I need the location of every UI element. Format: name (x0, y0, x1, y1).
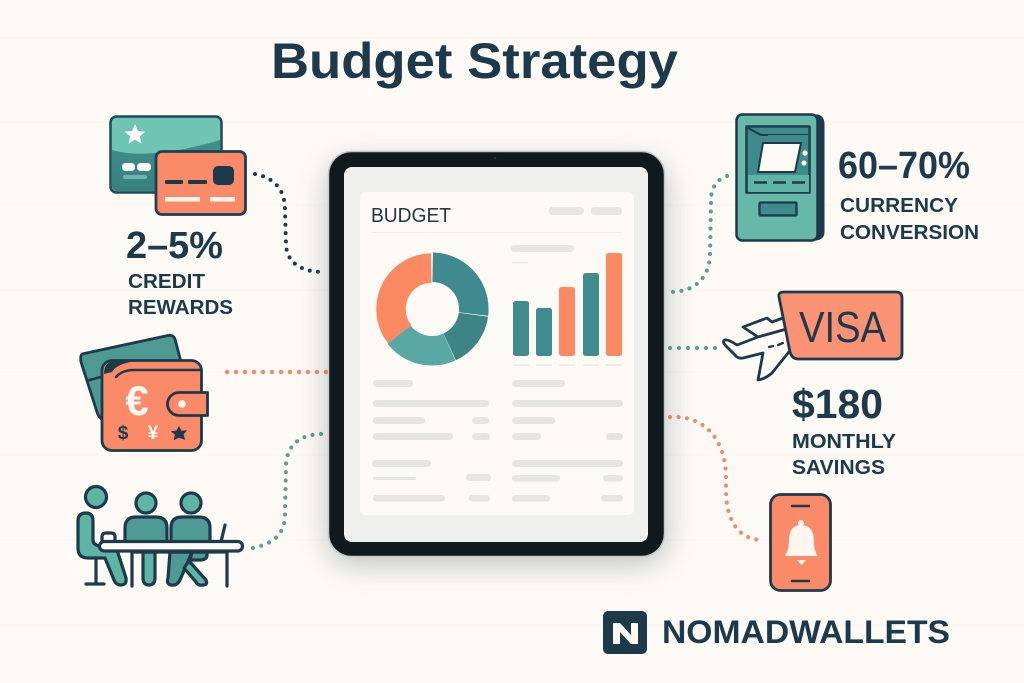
icon: ATM (736, 114, 824, 240)
icon: credit cards (110, 116, 246, 214)
stat: currency conversion: CURRENCY (840, 194, 958, 217)
icon: wallet: € (125, 377, 149, 424)
stat: monthly savings: $180 (792, 381, 883, 427)
stat: currency conversion: 60–70% (838, 145, 970, 187)
logo: nomadwallets: NOMADWALLETS (662, 614, 950, 650)
stat: monthly savings (792, 381, 896, 479)
connector: wallet to tablet (227, 370, 327, 374)
table placeholder rows (372, 380, 623, 502)
title: Budget Strategy (271, 33, 678, 89)
stat: credit rewards: CREDIT (128, 270, 205, 293)
connector: visa to tablet (670, 346, 718, 350)
connector: ATM to tablet (670, 176, 727, 292)
icon: airplane (724, 318, 792, 380)
stat: credit rewards: 2–5% (126, 225, 223, 267)
connector: credit cards to tablet (255, 174, 324, 272)
stat: credit rewards: REWARDS (128, 296, 233, 319)
bar chart (513, 253, 622, 365)
stat: monthly savings: MONTHLY (792, 430, 896, 453)
tablet (326, 152, 668, 566)
stat: credit rewards (126, 225, 233, 319)
icon: visa tag (779, 292, 902, 359)
stat: currency conversion (838, 145, 979, 244)
connector: team to tablet (253, 434, 323, 548)
heading: budget: BUDGET (371, 205, 451, 227)
logo: nomadwallets (603, 611, 950, 654)
connector: phone to tablet (670, 417, 763, 540)
header pills (372, 207, 622, 264)
icon: wallet (81, 335, 208, 450)
icon: phone with bell (770, 494, 830, 590)
panel: budget dashboard (360, 192, 634, 515)
icon: wallet: $ (118, 423, 129, 444)
stat: currency conversion: CONVERSION (840, 221, 979, 244)
icon: wallet: ¥ (148, 423, 159, 444)
donut chart (390, 267, 474, 351)
icon: team at table (78, 486, 242, 586)
icon: visa tag: VISA (799, 303, 887, 352)
stat: monthly savings: SAVINGS (792, 456, 885, 479)
